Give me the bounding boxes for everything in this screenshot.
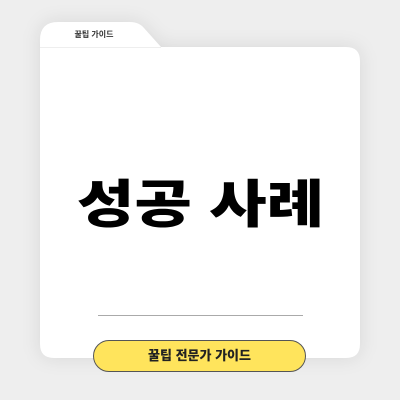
divider line bbox=[98, 315, 303, 316]
button: expert guide bbox=[93, 340, 306, 372]
tab label: 꿀팁 가이드 bbox=[74, 30, 114, 39]
title: 성공 사례 bbox=[77, 176, 324, 234]
button label: 꿀팁 전문가 가이드 bbox=[148, 348, 251, 363]
